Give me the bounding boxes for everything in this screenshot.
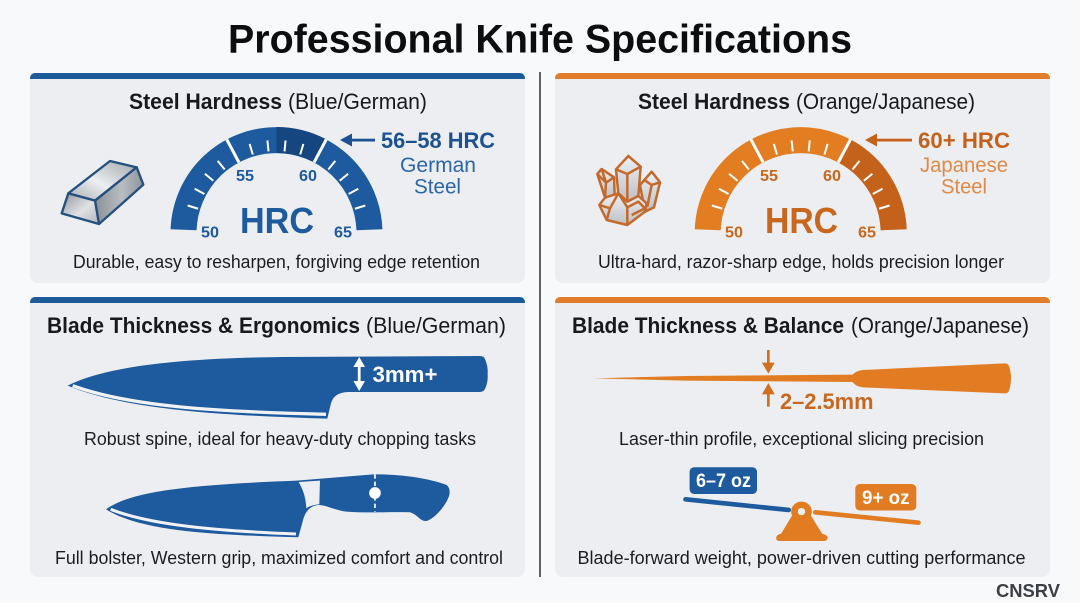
arrow: 56-58 pointer (340, 134, 375, 146)
label: 2-2.5mm: 2–2.5mm (780, 389, 874, 414)
icon: thick German blade (68, 356, 488, 419)
panel background (555, 297, 1050, 577)
callout: 56-58 HRC: 56–58 HRC (381, 128, 495, 153)
heading: (Orange/Japanese) (796, 89, 975, 114)
panel: steel hardness German (30, 73, 525, 283)
gauge: HRC German: 50 (201, 224, 219, 242)
watermark: CNSRV (996, 581, 1060, 601)
gauge: HRC Japanese: 50 (725, 224, 743, 242)
caption: Ultra-hard, razor-sharp edge, holds precision longer (598, 252, 1004, 272)
caption: Durable, easy to resharpen, forgiving edge retention (73, 252, 480, 272)
panel background (30, 73, 525, 283)
heading: Blade Thickness & Ergonomics (47, 313, 360, 338)
heading (129, 89, 427, 114)
gauge arc (708, 140, 894, 230)
title: Professional Knife Specifications (228, 18, 852, 62)
arrow: 3mm thickness (353, 357, 365, 391)
panel: blade thickness Japanese (555, 297, 1050, 577)
caption: Blade-forward weight, power-driven cutting performance (578, 548, 1026, 568)
heading: Steel Hardness (638, 89, 790, 114)
badge: 9+ oz: 9+ oz (862, 487, 910, 509)
icon: steel ingot (62, 161, 143, 224)
callout: 60+ HRC: 60+ HRC (918, 128, 1010, 153)
caption: Full bolster, Western grip, maximized comfort and control (55, 548, 503, 568)
heading: (Orange/Japanese) (851, 313, 1029, 338)
gauge: HRC German: 60 (299, 168, 317, 185)
highlighted range (276, 140, 320, 151)
callout: 56-58 HRC: Steel (414, 176, 461, 198)
heading: (Blue/German) (288, 89, 427, 114)
callout: 56-58 HRC: German (400, 154, 476, 177)
caption: Robust spine, ideal for heavy-duty chopping tasks (84, 429, 476, 449)
gauge: HRC Japanese: 60 (823, 168, 841, 185)
beam: orange side (815, 512, 918, 523)
label: 3mm+: 3mm+ (372, 362, 438, 387)
heading: Blade Thickness & Balance (572, 313, 844, 338)
icon: thin Japanese blade (594, 363, 1011, 393)
icon: crystal (597, 156, 660, 225)
gauge: HRC German (184, 139, 369, 242)
heading: (Blue/German) (366, 313, 506, 338)
panel: blade thickness German (30, 297, 525, 577)
callout: 60+ HRC (918, 128, 1010, 198)
caption: Laser-thin profile, exceptional slicing precision (619, 429, 984, 449)
badge: 6-7 oz: 6–7 oz (696, 470, 751, 492)
callout: 60+ HRC: Steel (941, 176, 987, 198)
gauge: HRC German: 55 (236, 168, 254, 185)
gauge arc (184, 140, 369, 230)
gauge: HRC Japanese (708, 139, 894, 242)
panel background (555, 73, 1050, 283)
gauge: HRC Japanese: 65 (858, 224, 876, 242)
heading (572, 313, 1029, 338)
callout: 60+ HRC: Japanese (920, 154, 1008, 177)
gauge: HRC German: 65 (334, 224, 352, 242)
panel top bar (555, 73, 1050, 79)
pivot (776, 502, 828, 541)
panel top bar (30, 73, 525, 79)
gauge: HRC Japanese: 55 (760, 168, 778, 185)
icon: Western knife with bolster (106, 474, 450, 537)
arrows: 2-2.5mm thickness (762, 350, 775, 407)
gauge: HRC German: HRC (240, 200, 314, 241)
beam: blue side (686, 499, 789, 510)
callout: 56-58 HRC (381, 128, 495, 198)
highlighted range (844, 151, 894, 230)
heading (638, 89, 975, 114)
panel top bar (30, 297, 525, 303)
heading: Steel Hardness (129, 89, 282, 114)
badge: 9+ oz (855, 484, 916, 510)
panel top bar (555, 297, 1050, 303)
center divider (539, 72, 541, 577)
arrow: 60+ pointer (865, 134, 912, 146)
balance diagram (686, 467, 918, 541)
panel: steel hardness Japanese (555, 73, 1050, 283)
gauge: HRC Japanese: HRC (765, 200, 838, 241)
panel background (30, 297, 525, 577)
